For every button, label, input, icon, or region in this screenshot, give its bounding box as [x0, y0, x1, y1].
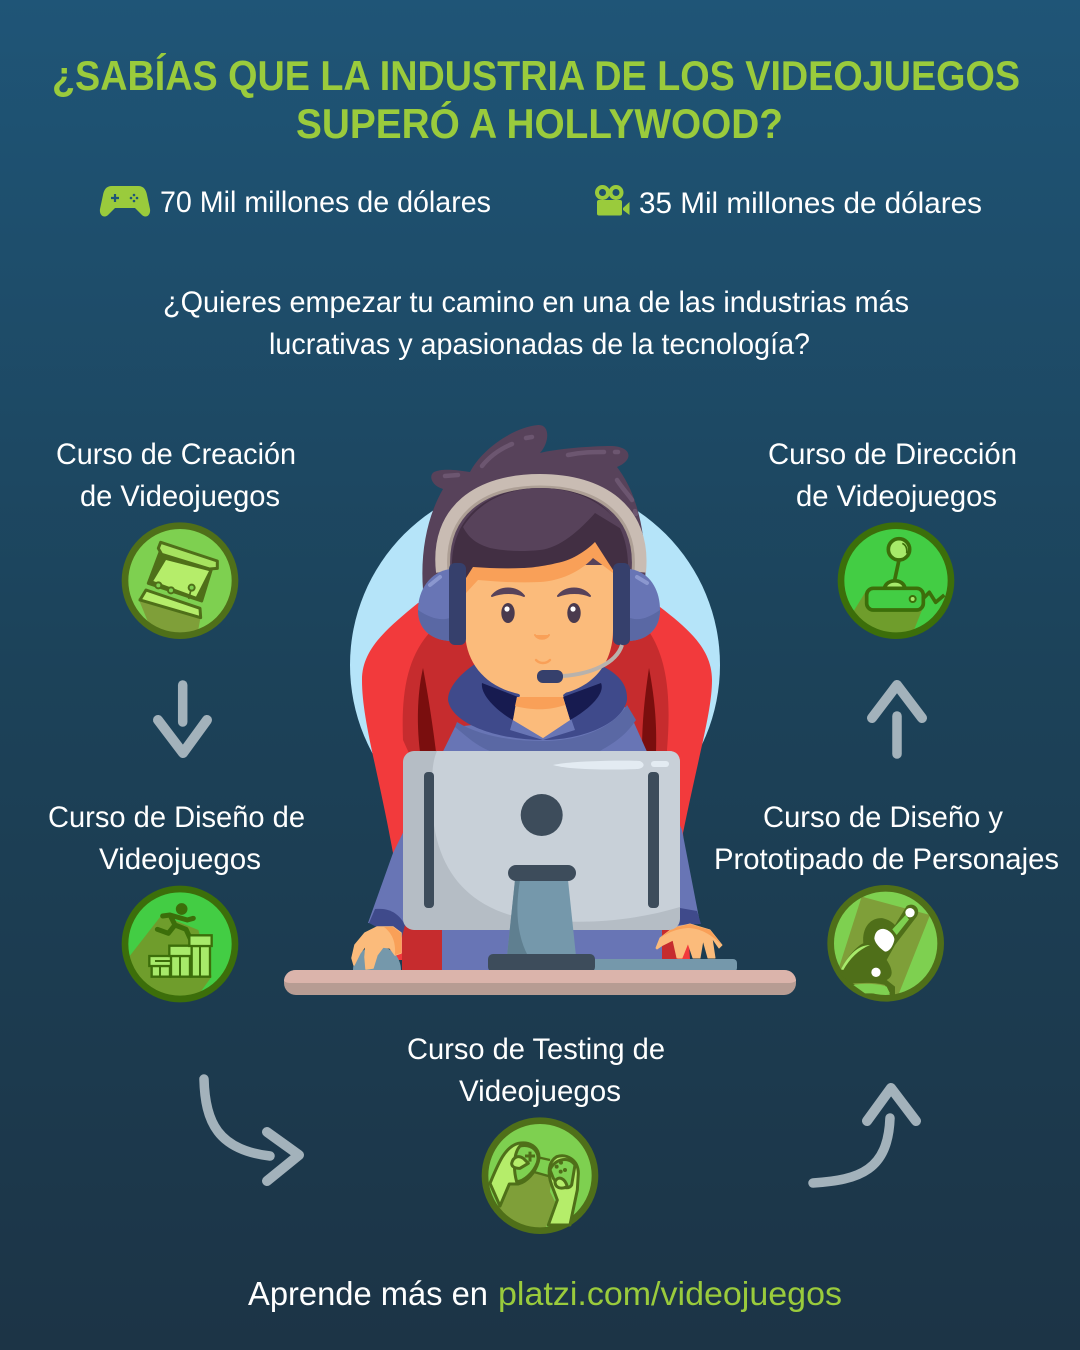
ear cup right [630, 569, 660, 641]
mouth [536, 660, 550, 663]
label [768, 438, 1017, 513]
gaming chair [362, 603, 712, 970]
label: Curso de Creación [56, 438, 296, 471]
nose [535, 635, 549, 639]
collar inner [482, 683, 518, 720]
ear cup left [418, 569, 450, 641]
monitor stand [488, 865, 595, 972]
desk items: mouse [353, 946, 401, 994]
cap hair dark [452, 488, 628, 578]
label [714, 801, 1059, 876]
icon: character [831, 888, 941, 998]
desk [284, 970, 796, 995]
cap hair light [463, 488, 623, 551]
footer call to action: platzi.com/videojuegos [498, 1275, 842, 1312]
microphone [537, 670, 563, 683]
ear band right [613, 563, 630, 645]
eyes [501, 603, 581, 623]
cuff right [678, 908, 701, 925]
cuff left [369, 909, 405, 940]
text: 70 mil millones: 70 Mil millones de dólares [160, 186, 491, 219]
hoodie [368, 707, 700, 970]
back hair [422, 425, 645, 590]
face shadow [466, 540, 613, 593]
neck [510, 680, 570, 738]
label: Curso de Dirección [768, 438, 1017, 471]
icon: hands with controllers [485, 1121, 595, 1231]
question text: lucrativas y apasionadas de la tecnología? [269, 328, 810, 361]
face [465, 565, 613, 696]
label: Curso de Testing de [407, 1033, 665, 1066]
label: Videojuegos [459, 1075, 621, 1108]
label: Prototipado de Personajes [714, 843, 1059, 876]
course: direccion [768, 438, 1017, 637]
monitor highlight [553, 761, 644, 770]
label: Videojuegos [99, 843, 261, 876]
arrow: down [158, 685, 207, 753]
camera circle [521, 794, 563, 836]
label: Curso de Diseño y [763, 801, 1003, 834]
illustration: gamer at computer [284, 425, 796, 995]
text: 35 mil millones: 35 Mil millones de dólares [639, 187, 982, 220]
title: SUPERÓ A HOLLYWOOD? [296, 100, 783, 147]
icon: joystick [841, 526, 951, 637]
icon: running over pipes [125, 889, 235, 999]
course: creacion [56, 438, 296, 636]
hand on keyboard [656, 924, 722, 958]
label [56, 438, 296, 513]
stat: movies [597, 187, 982, 220]
arrow: up [872, 685, 922, 754]
ear band left [449, 563, 466, 645]
eyebrows [492, 588, 590, 596]
vents [424, 772, 434, 908]
light blue circle [350, 480, 720, 850]
arrow: curved up [813, 1088, 916, 1183]
question text [163, 286, 909, 361]
hand on mouse [352, 927, 401, 969]
label [48, 801, 305, 876]
label: Curso de Diseño de [48, 801, 305, 834]
hair highlights [445, 437, 636, 514]
icon: gamepad [100, 186, 150, 216]
course: diseno [48, 801, 305, 999]
question text: ¿Quieres empezar tu camino en una de las industrias más [163, 286, 909, 319]
monitor [403, 751, 680, 930]
course: testing [407, 1033, 665, 1231]
label: de Videojuegos [80, 480, 280, 513]
headband [442, 481, 640, 572]
icon: arcade cabinet [125, 526, 235, 636]
footer call to action [248, 1275, 842, 1312]
title [52, 52, 1020, 147]
icon: film camera [597, 187, 630, 216]
label: de Videojuegos [796, 480, 997, 513]
arrow: curved right [204, 1079, 299, 1181]
label [407, 1033, 665, 1108]
keyboard [590, 959, 737, 972]
course: personajes [714, 801, 1059, 998]
hood shadow [455, 705, 636, 751]
stat: videogames [100, 186, 491, 219]
hood collar [448, 662, 627, 740]
microphone boom [563, 645, 622, 676]
neck front [513, 697, 570, 738]
footer call to action: Aprende más en [248, 1275, 488, 1312]
